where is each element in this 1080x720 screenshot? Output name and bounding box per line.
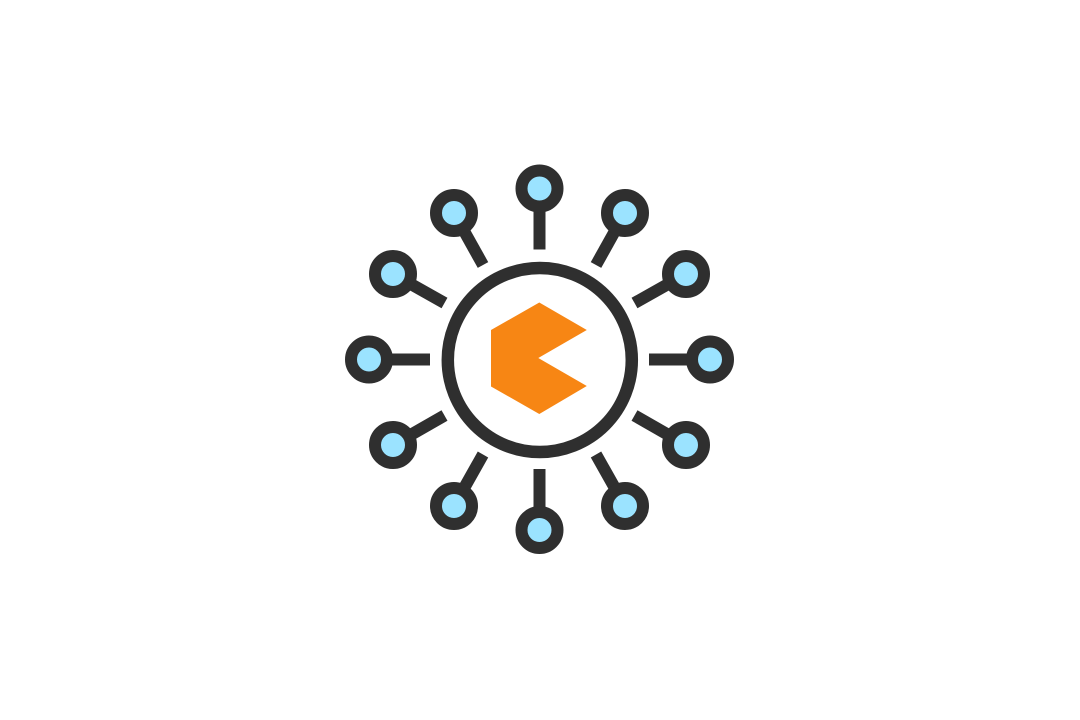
node: lower left 2 bbox=[375, 416, 444, 463]
node: lower right 2 bbox=[596, 454, 643, 524]
node: lower right 1 bbox=[634, 416, 704, 463]
central hub ring bbox=[448, 268, 632, 452]
node: upper left 1 bbox=[375, 256, 444, 303]
node: lower left 1 bbox=[436, 454, 483, 524]
node: top bbox=[522, 170, 558, 250]
node: bottom bbox=[522, 469, 558, 548]
orange logo mark bbox=[491, 302, 587, 414]
node: upper left 2 bbox=[436, 195, 483, 265]
spokes with nodes bbox=[351, 170, 728, 548]
node: upper right 2 bbox=[634, 256, 704, 303]
node: upper right 1 bbox=[596, 195, 643, 265]
node: right bbox=[649, 342, 728, 378]
node: left bbox=[351, 342, 430, 378]
